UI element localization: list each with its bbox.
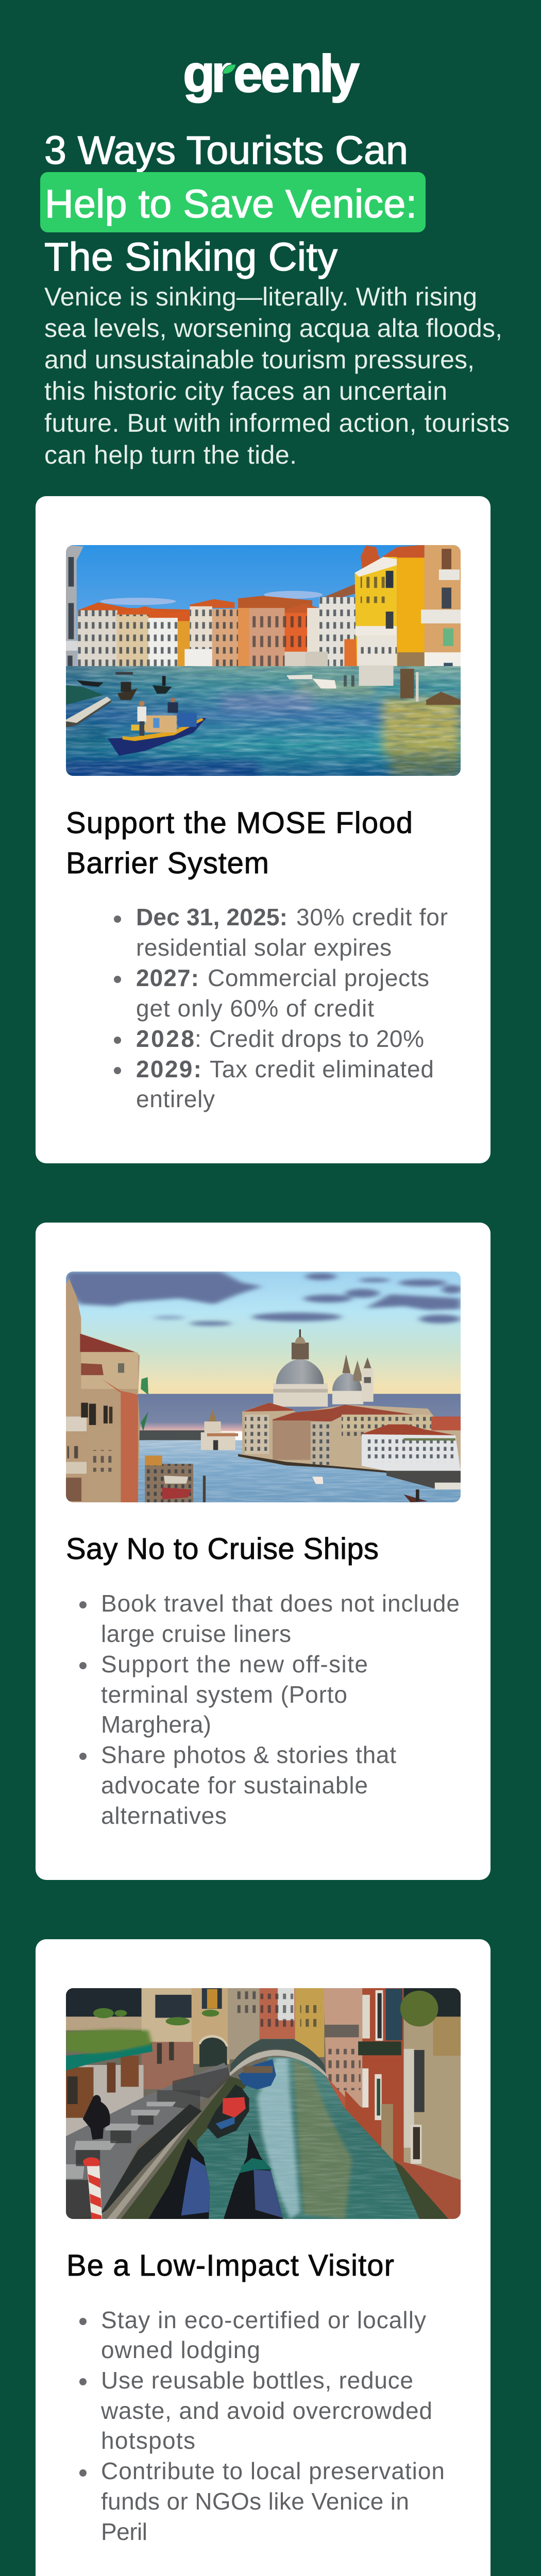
heading — [66, 806, 413, 880]
walkway — [66, 2063, 229, 2219]
bullet list: 2027: — [136, 964, 199, 991]
logo: greenly wordmark: greenly — [183, 44, 360, 103]
bullet list: : — [195, 1025, 201, 1052]
title — [40, 128, 426, 279]
Dogana tower — [204, 1421, 221, 1433]
canal water — [197, 2057, 419, 2219]
yellow palazzo — [361, 545, 425, 569]
bullet list: Peril — [101, 2518, 147, 2545]
bullet list: 2029: — [136, 1056, 201, 1082]
waterfront palazzi — [242, 1402, 461, 1471]
bullet list: Use reusable bottles, reduce — [101, 2367, 413, 2394]
bullet list: owned lodging — [101, 2336, 260, 2363]
photo: narrow Venetian canal with gondolas and bridge — [66, 1988, 461, 2219]
bullet list: Contribute to local preservation — [101, 2458, 445, 2484]
heading: Say No to Cruise Ships — [66, 1532, 379, 1566]
cargo boat — [108, 718, 206, 756]
bullet list: funds or NGOs like Venice in — [101, 2488, 409, 2515]
boats and poles — [145, 1464, 193, 1502]
intro paragraph: can help turn the tide. — [44, 440, 297, 469]
intro paragraph: Venice is sinking—literally. With rising — [44, 282, 477, 311]
bullet list: waste, and avoid overcrowded — [100, 2397, 432, 2424]
bullet list: entirely — [136, 1086, 215, 1112]
mooring post — [87, 2165, 102, 2219]
intro paragraph: sea levels, worsening acqua alta floods, — [44, 314, 502, 343]
title highlight: Help to Save Venice: — [45, 182, 417, 226]
water — [138, 1440, 461, 1503]
intro paragraph — [44, 282, 510, 469]
heading: Barrier System — [66, 846, 269, 880]
far building — [259, 1988, 295, 2039]
bullet list: Commercial projects — [208, 964, 429, 991]
bullet list: get only 60% of credit — [136, 995, 374, 1022]
bullet list — [79, 2307, 445, 2545]
bullet list: hotspots — [101, 2427, 195, 2454]
bullet list: Marghera) — [101, 1711, 211, 1738]
water — [66, 666, 461, 776]
right facades — [295, 1988, 325, 2057]
bullet list: Credit drops to 20% — [209, 1025, 424, 1052]
intro paragraph: and unsustainable tourism pressures, — [44, 345, 475, 374]
bullet list: residential solar expires — [136, 934, 392, 961]
left facades — [66, 1988, 143, 2017]
heading: Be a Low-Impact Visitor — [66, 2249, 394, 2282]
bridge — [229, 2050, 326, 2076]
photo: Grand Canal with colourful palazzi and cargo boat — [66, 545, 461, 781]
person — [83, 2095, 110, 2140]
distant shore — [139, 1430, 204, 1440]
bullet list: Tax credit eliminated — [210, 1056, 434, 1082]
bullet list: 30% credit for — [296, 904, 448, 930]
bottom gondolas — [148, 2139, 210, 2219]
panel: Be a Low-Impact Visitor — [36, 1939, 491, 2576]
bullet list: 2028 — [136, 1025, 194, 1052]
horizon cloud bank — [138, 1394, 461, 1431]
distant palazzi — [78, 602, 190, 619]
bullet list: advocate for sustainable — [101, 1772, 368, 1799]
railings and tables — [173, 2067, 230, 2098]
panel: Say No to Cruise Ships — [36, 1223, 491, 1880]
right palazzo — [425, 545, 461, 655]
mooring poles — [344, 675, 354, 687]
shop — [66, 2065, 144, 2139]
photo: Santa Maria della Salute over the Grand Canal at dusk — [66, 1272, 462, 1503]
intro paragraph: this historic city faces an uncertain — [44, 377, 447, 405]
bullet list: Support the new off-site — [101, 1651, 368, 1677]
bullet list — [79, 1590, 460, 1829]
bullet list: Book travel that does not include — [101, 1590, 460, 1617]
bullet list: alternatives — [101, 1802, 227, 1829]
bullet list: Stay in eco-certified or locally — [101, 2307, 426, 2333]
bullet list: large cruise liners — [101, 1620, 291, 1647]
panel: Support the MOSE Flood Barrier System — [36, 496, 491, 1163]
bullet list: terminal system (Porto — [101, 1681, 347, 1708]
title: The Sinking City — [44, 235, 338, 279]
bullet list: Dec 31, 2025: — [136, 904, 288, 930]
icon: logo leaf — [223, 64, 236, 74]
bullet list — [114, 904, 448, 1112]
title: 3 Ways Tourists Can — [44, 128, 408, 173]
left buildings — [66, 1279, 140, 1502]
heading: Support the MOSE Flood — [66, 806, 413, 840]
intro paragraph: future. But with informed action, tourists — [44, 409, 510, 437]
left quay — [66, 685, 104, 705]
far gondolas — [77, 680, 104, 687]
clouds — [66, 1272, 462, 1326]
left tower — [66, 545, 83, 666]
bullet list: Share photos & stories that — [101, 1741, 396, 1768]
red gondola — [207, 2084, 249, 2139]
Salute domes — [273, 1383, 328, 1406]
blue boat — [238, 2059, 276, 2090]
